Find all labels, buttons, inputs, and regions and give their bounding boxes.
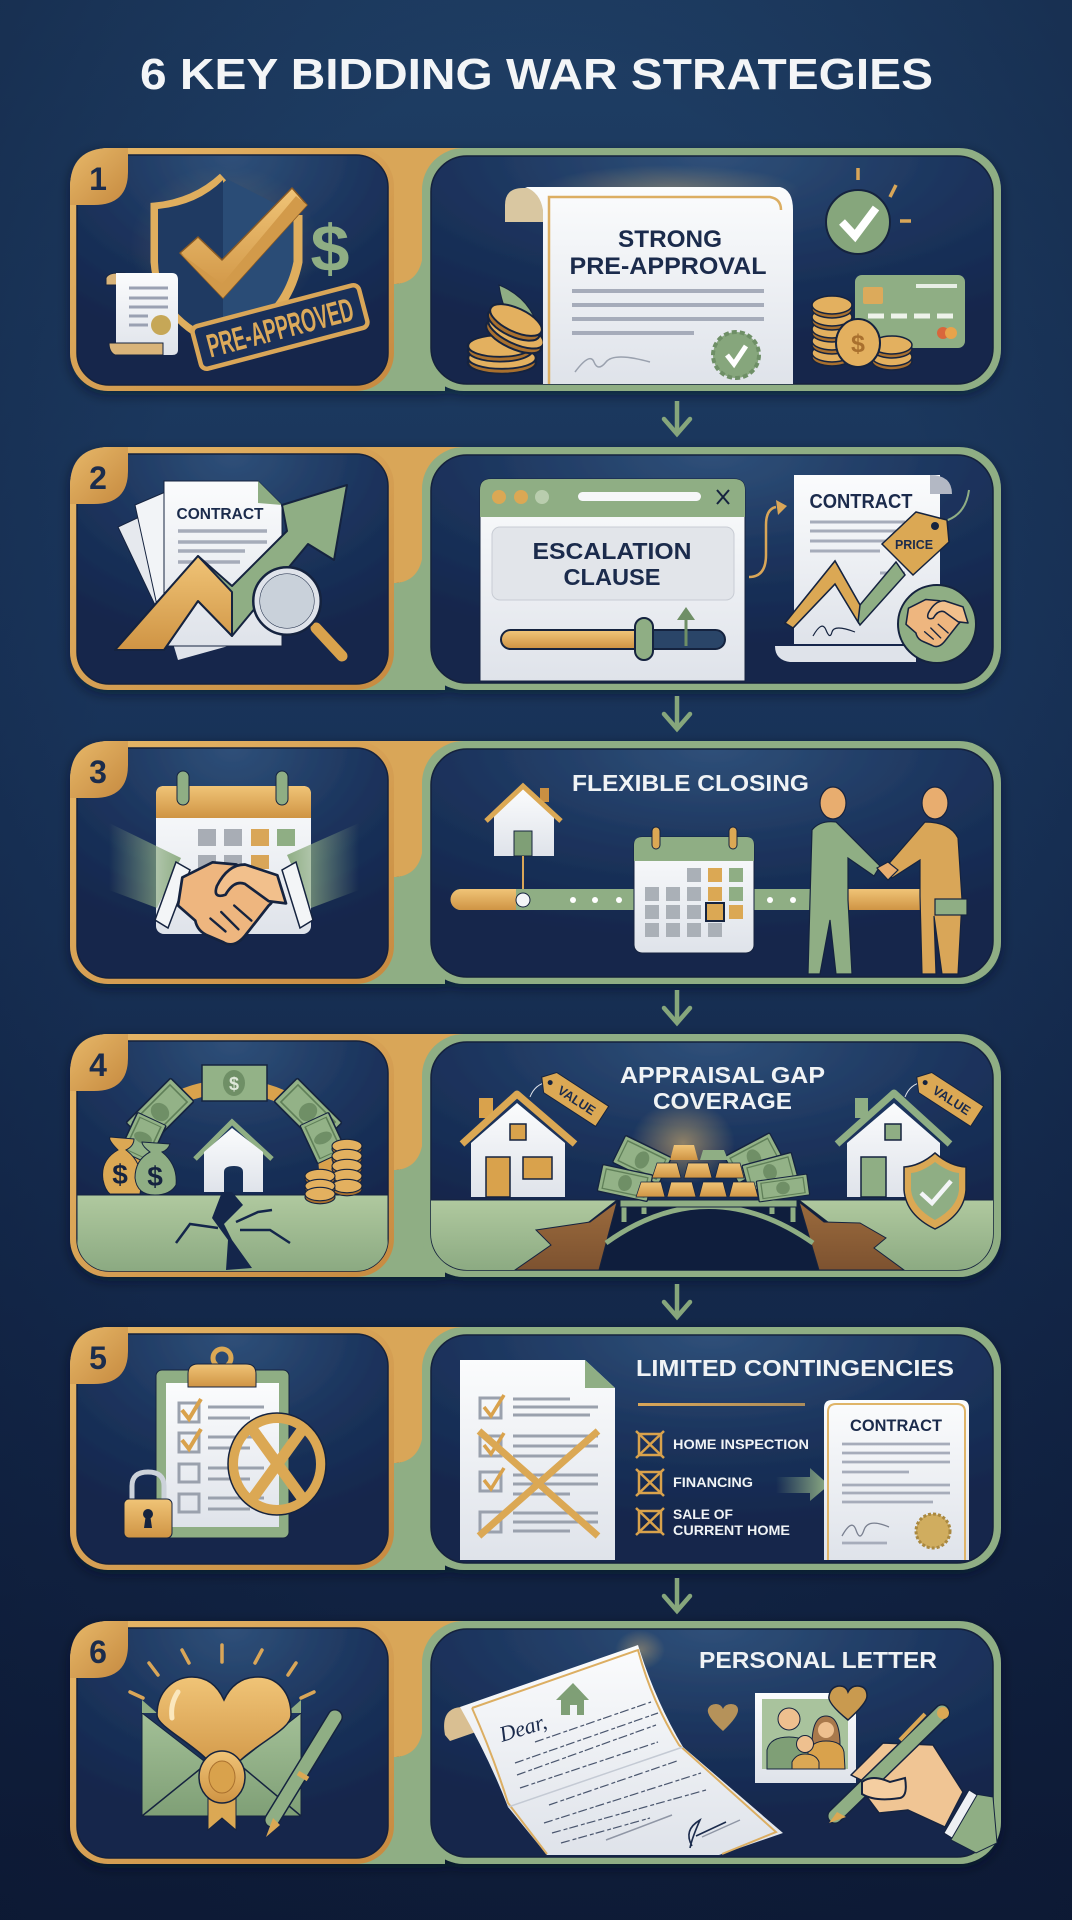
icon: small heart: [708, 1704, 738, 1731]
contingency list: SALE OF: [673, 1506, 733, 1522]
arrow 3: [664, 990, 690, 1023]
row 1: strong pre-approval: [70, 148, 1001, 391]
number badge 5: 5: [89, 1340, 107, 1376]
number badge 6: 6: [89, 1634, 107, 1670]
frame: row 1 panels: [70, 148, 1001, 391]
icon panel: clipboard, lock and no-symbol: [124, 1349, 326, 1538]
scene panel: limited contingencies: [460, 1355, 969, 1560]
document: strong pre-approval: [505, 187, 793, 384]
timeline: [450, 889, 924, 910]
icon panel: cash arch over cracked ground: $: [147, 1161, 163, 1192]
icon panel: cash arch over cracked ground: [77, 1065, 388, 1280]
letter: Dear,: [495, 1709, 550, 1747]
icon: credit card and coins: [812, 275, 965, 370]
row 6: personal letter: [70, 1621, 1001, 1864]
arrow 5: [664, 1578, 690, 1611]
document: contract with price tag: [775, 475, 976, 663]
number badge 1: 1: [89, 161, 107, 197]
row 3: flexible closing: [70, 741, 1001, 984]
icon: calendar: [634, 827, 754, 953]
scene panel: escalation clause: [480, 475, 976, 681]
browser window: escalation clause: CLAUSE: [564, 564, 660, 590]
browser window: escalation clause: ESCALATION: [532, 538, 692, 564]
icon panel: shield with check and stamp: PRE-APPROVED: [203, 291, 357, 364]
arrow to contract: [776, 1468, 829, 1501]
frame: row 3 panels: [70, 741, 1001, 984]
scene panel: appraisal gap bridged: APPRAISAL GAP: [620, 1062, 825, 1088]
row 4: appraisal gap coverage: [70, 1034, 1001, 1280]
icon panel: contract with rising arrow: [115, 481, 347, 660]
icon panel: contract with rising arrow: CONTRACT: [176, 506, 264, 523]
arrow head: [776, 500, 787, 515]
icon: house: [486, 786, 561, 890]
contingency list: FINANCING: [673, 1474, 753, 1490]
scene panel: personal letter: [444, 1630, 997, 1855]
contingency list: HOME INSPECTION: [673, 1436, 809, 1452]
ground and bridge: [431, 1200, 993, 1270]
document: strong pre-approval: STRONG: [618, 226, 722, 253]
frame: row 6 panels: [70, 1621, 1001, 1864]
house with green roof, value tag and shield: [837, 1067, 984, 1229]
contingency list: CURRENT HOME: [673, 1522, 790, 1538]
row 5: limited contingencies: [70, 1327, 1001, 1570]
frame: row 5 panels: [70, 1327, 1001, 1570]
house with orange roof and value tag: VALUE: [555, 1083, 599, 1118]
icon panel: envelope with heart and pen: [130, 1645, 335, 1837]
scene panel: flexible closing timeline: [450, 770, 967, 974]
document: crossed-out checklist: [460, 1360, 615, 1560]
document: contract with price tag: PRICE: [895, 537, 933, 552]
icon: green check badge: [826, 168, 911, 254]
number badge 4: 4: [89, 1047, 107, 1083]
icon panel: cash arch over cracked ground: $: [112, 1159, 128, 1190]
arrow: window to contract: [749, 507, 776, 577]
browser window: escalation clause: [480, 479, 745, 681]
gold bars and cash pile: [597, 1101, 810, 1202]
contingency list: [636, 1431, 809, 1538]
frame: row 4 panels: [70, 1034, 1001, 1277]
icon: credit card and coins: $: [851, 330, 865, 358]
arrow 1: [664, 401, 690, 434]
title: 6 KEY BIDDING WAR STRATEGIES: [140, 50, 933, 99]
document: contract with price tag: CONTRACT: [810, 491, 912, 513]
house with orange roof and value tag: [462, 1067, 609, 1197]
arrow 2: [664, 696, 690, 729]
row 2: escalation clause: [70, 447, 1001, 690]
icon panel: cash arch over cracked ground: $: [229, 1074, 239, 1094]
number badge 3: 3: [89, 754, 107, 790]
icon: coins and leaf: [468, 285, 548, 374]
scene panel: appraisal gap bridged: [425, 1062, 1000, 1280]
frame: row 2 panels: [70, 447, 1001, 690]
icon panel: shield with check and stamp: [106, 165, 369, 370]
arrow 4: [664, 1284, 690, 1317]
number badge 2: 2: [89, 460, 107, 496]
icon panel: shield with check and stamp: $: [310, 211, 350, 285]
heading: LIMITED CONTINGENCIES: [636, 1355, 954, 1381]
heading: PERSONAL LETTER: [699, 1647, 937, 1673]
scene panel: appraisal gap bridged: COVERAGE: [653, 1088, 792, 1114]
figures shaking hands: [808, 787, 967, 974]
house with green roof, value tag and shield: VALUE: [930, 1083, 974, 1118]
icon panel: calendar and handshake: [109, 771, 359, 944]
document: contract: [824, 1400, 969, 1560]
letter: [444, 1630, 783, 1855]
scene panel: flexible closing timeline: FLEXIBLE CLOSING: [572, 770, 809, 796]
document: contract: CONTRACT: [850, 1416, 943, 1435]
family photo with heart: [755, 1686, 867, 1783]
document: strong pre-approval: PRE-APPROVAL: [570, 253, 766, 280]
icon: hand holding pen: [829, 1707, 997, 1853]
scene panel: strong pre-approval document: [468, 165, 965, 384]
